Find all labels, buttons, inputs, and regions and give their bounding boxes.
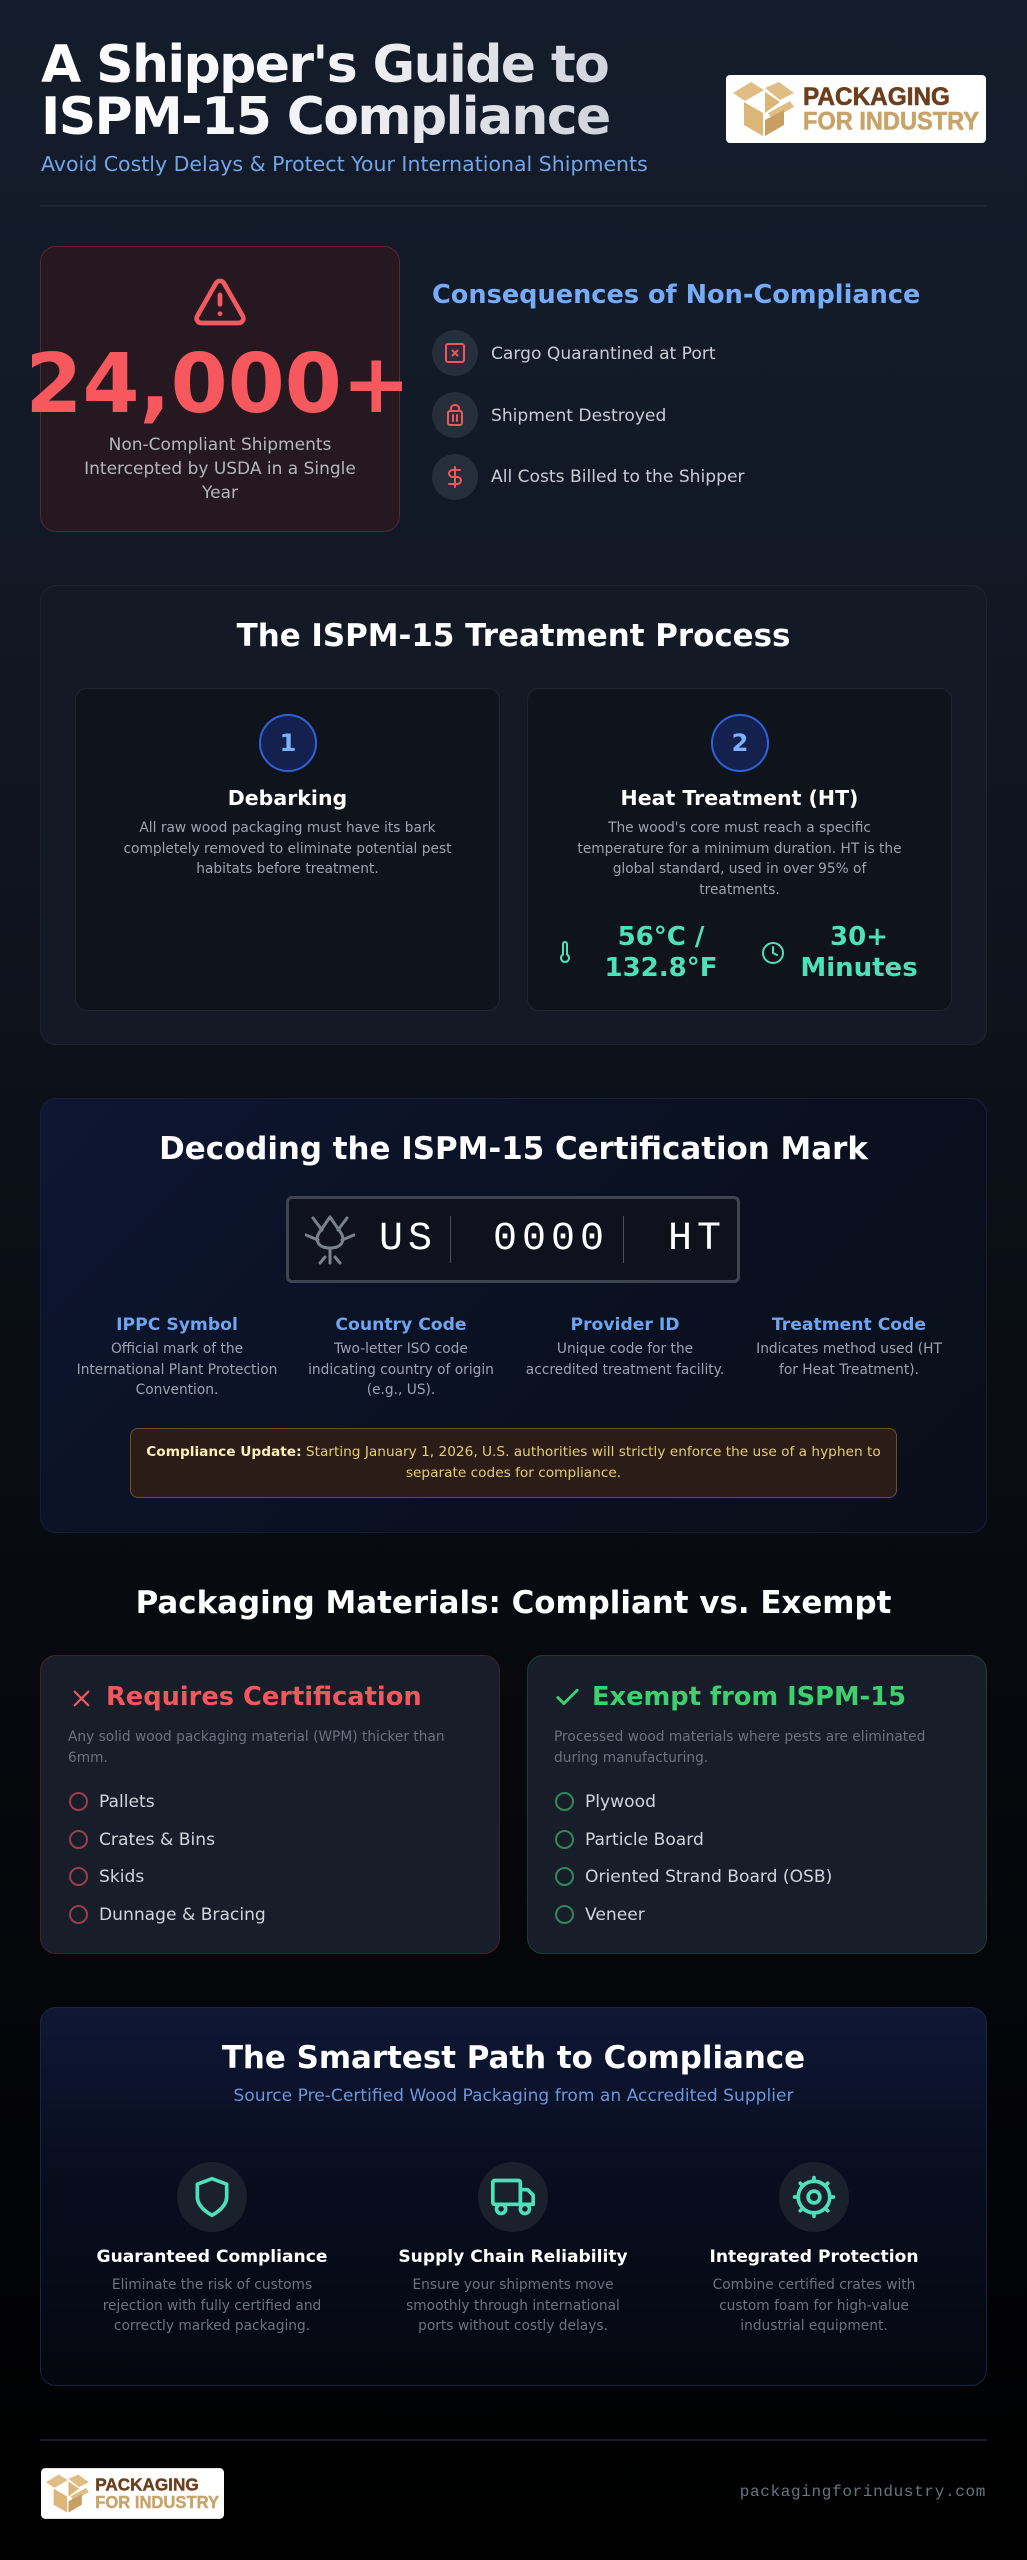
text: exempt description: Processed wood materials where pests are eliminated xyxy=(554,1729,925,1745)
legend: country code: indicating country of origin xyxy=(308,1362,494,1378)
legend: provider id: Unique code for the xyxy=(557,1341,693,1357)
footer logo: FOR INDUSTRY xyxy=(95,2492,219,2512)
benefit: integrated protection: custom foam for high-value xyxy=(719,2298,909,2314)
benefit: supply chain reliability xyxy=(398,2162,628,2334)
benefit: integrated protection xyxy=(710,2162,918,2334)
legend: country code: Two-letter ISO code xyxy=(334,1341,468,1357)
list: exempt items: Oriented Strand Board (OSB) xyxy=(585,1867,832,1887)
step text: completely removed to eliminate potential pest xyxy=(124,841,452,857)
list: exempt items: Particle Board xyxy=(585,1830,704,1850)
legend: country code: (e.g., US). xyxy=(367,1382,435,1398)
legend: treatment code: Treatment Code xyxy=(772,1315,926,1335)
consequence: destroyed xyxy=(432,392,666,438)
subtitle: Avoid Costly Delays & Protect Your International Shipments xyxy=(41,152,648,176)
big number: 24,000+ xyxy=(25,337,411,432)
callout: compliance update: separate codes for compliance. xyxy=(406,1465,621,1481)
step text xyxy=(577,820,902,898)
text: requires description: Any solid wood packaging material (WPM) thicker than xyxy=(68,1729,445,1745)
stat: duration: 30+ xyxy=(830,922,888,952)
certification stamp xyxy=(286,1196,740,1283)
icon: cross xyxy=(74,1690,90,1706)
footer logo xyxy=(41,2468,224,2519)
benefit: supply chain reliability: Supply Chain Reliability xyxy=(398,2247,628,2267)
logo: Packaging for Industry: FOR INDUSTRY xyxy=(803,108,979,136)
stat caption xyxy=(84,435,356,503)
step text: All raw wood packaging must have its bark xyxy=(139,820,436,836)
benefit: supply chain reliability: smoothly through international xyxy=(406,2298,620,2314)
card: heat treatment xyxy=(527,688,952,1011)
card: debarking xyxy=(75,688,500,1011)
text: exempt description xyxy=(554,1729,925,1766)
logo: Packaging for Industry xyxy=(726,75,986,143)
consequence: quarantined xyxy=(432,330,716,376)
legend: IPPC symbol: Convention. xyxy=(136,1382,218,1398)
benefit: supply chain reliability: ports without costly delays. xyxy=(418,2318,608,2334)
heading: certification mark: Decoding the ISPM-15 Certification Mark xyxy=(159,1131,868,1167)
benefit: guaranteed compliance: rejection with fully certified and xyxy=(103,2298,321,2314)
stat: temperature: 132.8°F xyxy=(604,953,718,983)
code: treatment: HT xyxy=(668,1217,726,1262)
legend: provider id xyxy=(526,1315,724,1378)
heading: smartest path: The Smartest Path to Compliance xyxy=(222,2040,805,2076)
list: exempt items: Veneer xyxy=(585,1905,645,1925)
step text: global standard, used in over 95% of xyxy=(613,861,866,877)
list: certified items xyxy=(69,1792,266,1925)
legend: provider id: Provider ID xyxy=(570,1315,680,1335)
list: certified items: Crates & Bins xyxy=(99,1830,215,1850)
stat caption: Year xyxy=(202,483,238,503)
panel: smartest path xyxy=(40,2007,987,2386)
step text xyxy=(124,820,452,877)
list: certified items: Dunnage & Bracing xyxy=(99,1905,266,1925)
panel: statistic xyxy=(40,246,400,532)
panel: exempt xyxy=(527,1655,987,1954)
title: A Shipper's Guide to xyxy=(41,35,608,95)
stat caption: Non-Compliant Shipments xyxy=(109,435,331,455)
icon: thermometer xyxy=(560,941,570,963)
stat: temperature xyxy=(604,922,718,983)
legend: country code: Country Code xyxy=(335,1315,467,1335)
consequence: costs xyxy=(432,454,745,500)
step title: Debarking xyxy=(228,786,347,810)
text: requires description xyxy=(68,1729,445,1766)
benefit: integrated protection: industrial equipment. xyxy=(740,2318,888,2334)
heading: treatment process: The ISPM-15 Treatment Process xyxy=(237,618,790,654)
legend: IPPC symbol xyxy=(77,1315,277,1398)
legend: IPPC symbol: International Plant Protection xyxy=(77,1362,277,1378)
legend: country code xyxy=(308,1315,494,1398)
stat caption: Intercepted by USDA in a Single xyxy=(84,459,356,479)
icon: check xyxy=(556,1688,579,1706)
consequence: destroyed: Shipment Destroyed xyxy=(491,406,666,426)
logo: Packaging for Industry: PACKAGING xyxy=(803,83,950,111)
text: exempt description: during manufacturing. xyxy=(554,1750,708,1766)
title xyxy=(41,39,611,143)
benefit: integrated protection: Combine certified crates with xyxy=(713,2277,915,2293)
list: exempt items: Plywood xyxy=(585,1792,656,1812)
stat: duration: Minutes xyxy=(800,953,918,983)
callout: compliance update xyxy=(130,1428,897,1498)
legend: treatment code xyxy=(756,1315,942,1378)
icon: clock xyxy=(762,942,784,964)
code: provider: 0000 xyxy=(493,1217,609,1262)
panel: certification mark xyxy=(40,1098,987,1533)
footer logo: PACKAGING xyxy=(95,2475,199,2495)
legend: treatment code: for Heat Treatment). xyxy=(779,1362,919,1378)
step number 1 xyxy=(259,714,317,772)
step text: treatments. xyxy=(699,882,780,898)
code: country: US xyxy=(379,1217,437,1262)
consequence: costs: All Costs Billed to the Shipper xyxy=(491,467,745,487)
list: certified items: Pallets xyxy=(99,1792,155,1812)
panel: requires certification xyxy=(40,1655,500,1954)
stat: duration xyxy=(800,922,918,983)
list: certified items: Skids xyxy=(99,1867,144,1887)
subheading: smartest path: Source Pre-Certified Wood Packaging from an Accredited Supplier xyxy=(233,2086,794,2106)
legend: IPPC symbol: IPPC Symbol xyxy=(116,1315,238,1335)
list: exempt items xyxy=(555,1792,832,1925)
consequence: quarantined: Cargo Quarantined at Port xyxy=(491,344,716,364)
step number 2 xyxy=(711,714,769,772)
step title: Heat Treatment (HT) xyxy=(621,786,858,810)
footer url: packagingforindustry.com xyxy=(740,2483,986,2501)
callout: compliance update: Compliance Update: Starting January 1, 2026, U.S. authorities will strictly enforce the use of a hyphen to xyxy=(146,1444,881,1460)
step text: habitats before treatment. xyxy=(196,861,379,877)
legend: IPPC symbol: Official mark of the xyxy=(111,1341,243,1357)
icon: IPPC wheat symbol xyxy=(305,1215,355,1265)
stat: temperature: 56°C / xyxy=(618,922,704,952)
step text: The wood's core must reach a specific xyxy=(608,820,871,836)
heading: exempt: Exempt from ISPM-15 xyxy=(592,1682,906,1712)
panel: treatment process xyxy=(40,585,987,1045)
step number 1: 1 xyxy=(280,729,296,757)
heading: packaging materials: Packaging Materials: Compliant vs. Exempt xyxy=(136,1585,891,1621)
title: ISPM-15 Compliance xyxy=(41,87,610,147)
benefit: guaranteed compliance: Guaranteed Compliance xyxy=(97,2247,327,2267)
icon: warning triangle xyxy=(194,278,246,326)
benefit: guaranteed compliance: correctly marked packaging. xyxy=(114,2318,310,2334)
benefit: supply chain reliability: Ensure your shipments move xyxy=(412,2277,614,2293)
benefit: guaranteed compliance: Eliminate the risk of customs xyxy=(112,2277,312,2293)
benefit: integrated protection: Integrated Protection xyxy=(710,2247,918,2267)
legend: treatment code: Indicates method used (HT xyxy=(756,1341,942,1357)
consequences heading: Consequences of Non-Compliance xyxy=(432,280,920,310)
legend: provider id: accredited treatment facility. xyxy=(526,1362,724,1378)
text: requires description: 6mm. xyxy=(68,1750,108,1766)
heading: requires certification: Requires Certification xyxy=(106,1682,422,1712)
step number 2: 2 xyxy=(732,729,748,757)
benefit: guaranteed compliance xyxy=(97,2162,327,2334)
step text: temperature for a minimum duration. HT is the xyxy=(577,841,902,857)
